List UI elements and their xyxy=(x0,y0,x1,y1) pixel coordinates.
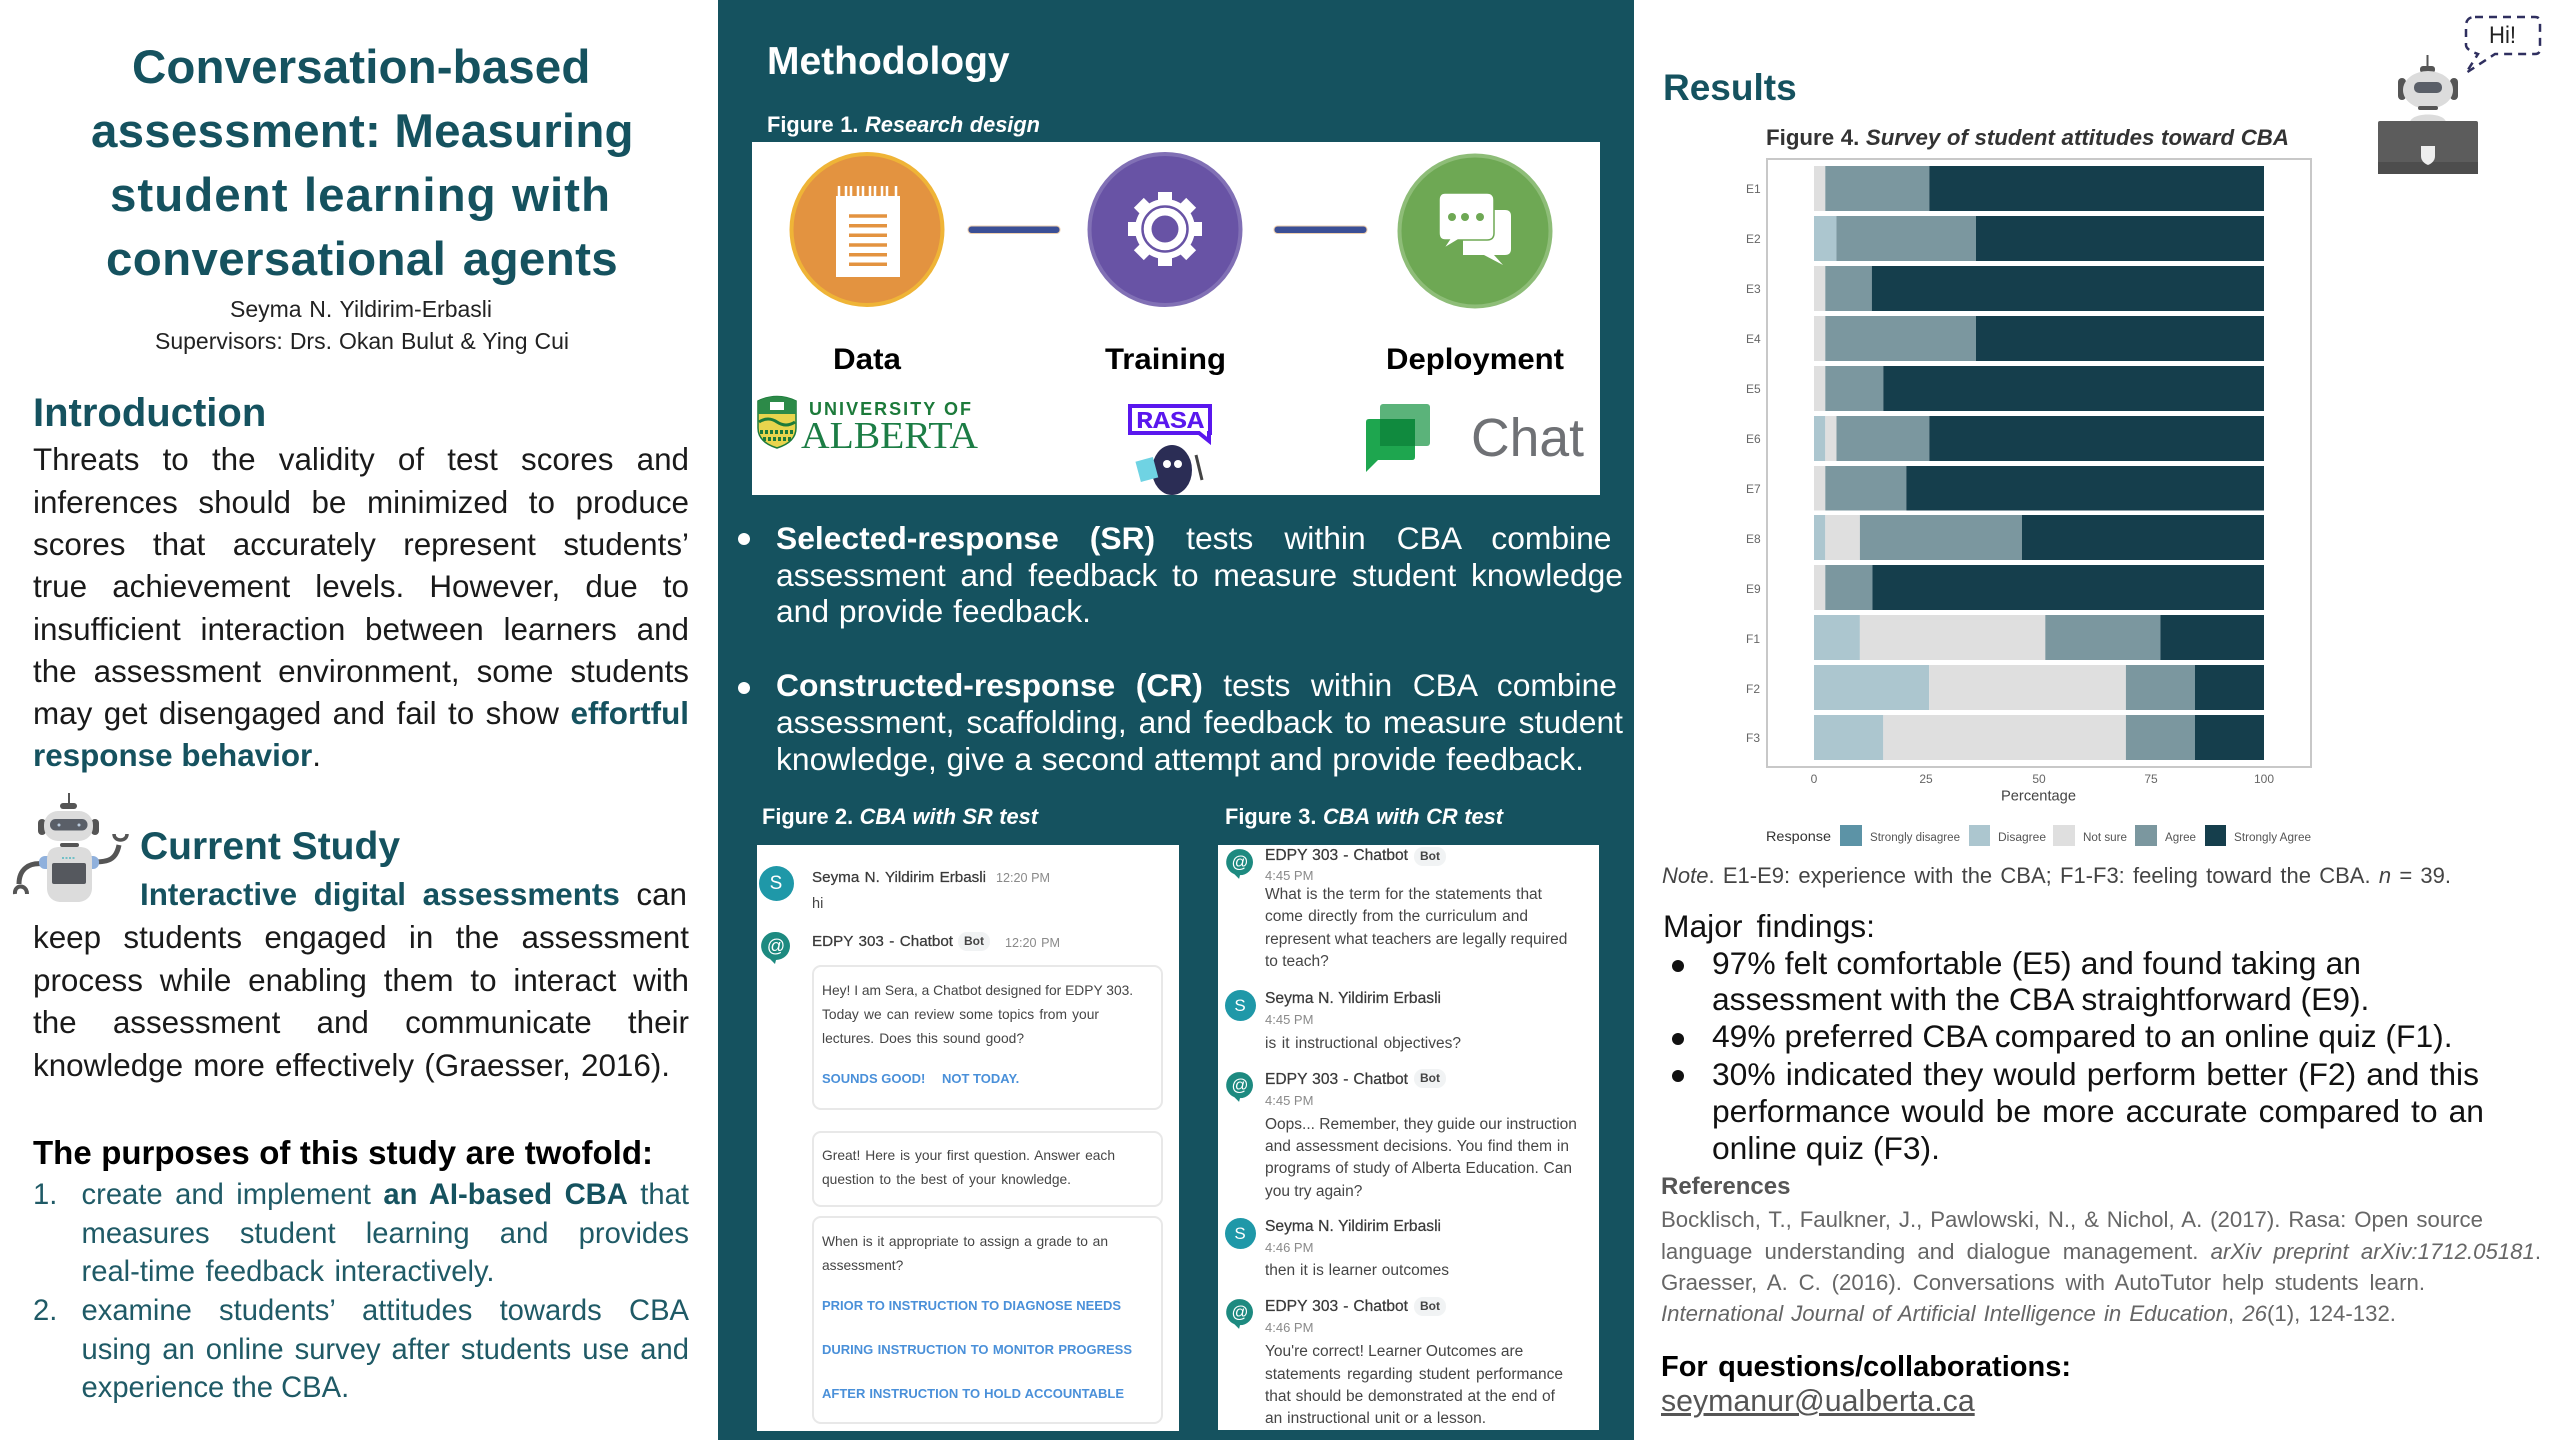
text block: major findings: online quiz (F3). xyxy=(1712,1130,1940,1166)
chatbot question: come directly from the curriculum and xyxy=(1265,908,1528,925)
card: multiple choice question: When is it appropriate to assign a grade to an xyxy=(822,1234,1108,1249)
timestamp: 12:20 PM xyxy=(996,871,1050,885)
student answer xyxy=(1225,990,1461,1052)
text block: current study xyxy=(33,877,689,1083)
bullet: selected-response tests: assessment and feedback to measure student knowledge xyxy=(776,557,1623,593)
legend xyxy=(1766,825,2311,846)
bars: E9 xyxy=(1814,565,2264,610)
icon: training gear xyxy=(1090,154,1240,305)
contact block: seymanur@ualberta.ca xyxy=(1661,1385,1975,1418)
logo: RASA xyxy=(1130,406,1210,441)
y axis labels: E3 xyxy=(1746,282,1761,296)
numbered list: purposes: create and implement an AI-based CBA that xyxy=(82,1179,689,1211)
authors and supervisors: Seyma N. Yildirim-Erbasli xyxy=(230,296,492,322)
heading: purposes of the study: The purposes of this study are twofold: xyxy=(33,1134,653,1171)
title: conversational agents xyxy=(106,233,618,286)
figure 1: research design xyxy=(752,142,1600,495)
title: student learning with xyxy=(110,169,611,222)
student second attempt: then it is learner outcomes xyxy=(1265,1262,1449,1279)
title: Conversation-based xyxy=(132,41,590,94)
legend: Strongly Agree xyxy=(2234,832,2311,844)
arrow: connector data to training xyxy=(968,226,1060,234)
bullet: selected-response tests: Selected-response (SR) tests within CBA combine xyxy=(776,520,1612,556)
bullet: constructed-response tests: knowledge, give a second attempt and provide feedback. xyxy=(776,741,1584,777)
note under figure 4: Note. E1-E9: experience with the CBA; F1-F3: feeling toward the CBA. n = 39. xyxy=(1662,863,2451,888)
card: first question intro: Great! Here is your first question. Answer each xyxy=(822,1148,1115,1163)
text block: current study: Interactive digital assessments can xyxy=(140,877,687,912)
chatbot question: 4:45 PM xyxy=(1265,868,1313,883)
chatbot scaffolding feedback: programs of study of Alberta Education. Can xyxy=(1265,1160,1572,1177)
chatbot scaffolding feedback: and assessment decisions. You find them in xyxy=(1265,1138,1569,1155)
arrow: connector training to deployment xyxy=(1274,226,1367,234)
icon: waving robot xyxy=(12,793,129,902)
bars: E3 xyxy=(1814,266,2264,311)
logo: University of Alberta: ALBERTA xyxy=(801,415,979,457)
card: greeting: NOT TODAY. xyxy=(942,1071,1019,1086)
bullet: constructed-response tests: Constructed-response (CR) tests within CBA combine xyxy=(776,667,1617,703)
text block: references: Graesser, A. C. (2016). Conversations with AutoTutor help students learn. xyxy=(1661,1270,2425,1295)
chatbot scaffolding feedback: EDPY 303 - Chatbot xyxy=(1265,1071,1408,1088)
logo: Google Chat xyxy=(1366,404,1584,472)
chatbot final feedback: Bot xyxy=(1420,1299,1440,1313)
numbered list: purposes: 1. xyxy=(33,1179,57,1211)
text block: references: language understanding and dialogue management. arXiv preprint arXiv:1712.05181. xyxy=(1661,1239,2541,1264)
bullet: selected-response tests: and provide feedback. xyxy=(776,593,1091,629)
chatbot final feedback: 4:46 PM xyxy=(1265,1320,1313,1335)
logo: RASA: RASA xyxy=(1136,409,1205,436)
card: greeting: Today we can review some topics from your xyxy=(822,1007,1099,1022)
chatbot scaffolding feedback: 4:45 PM xyxy=(1265,1093,1313,1108)
chatbot question: EDPY 303 - Chatbot xyxy=(1265,847,1408,864)
heading: Current Study: Current Study xyxy=(140,825,400,868)
bars: E4 xyxy=(1814,316,2264,361)
chatbot scaffolding feedback: Bot xyxy=(1420,1071,1440,1085)
x axis labels: 100 xyxy=(2254,772,2274,786)
numbered list: purposes: real-time feedback interactively. xyxy=(82,1256,494,1288)
numbered list: purposes: measures student learning and provides xyxy=(82,1218,689,1250)
title xyxy=(91,41,634,286)
title: assessment: Measuring xyxy=(91,105,634,158)
student second attempt: S xyxy=(1234,1224,1246,1242)
text block: major findings: 49% preferred CBA compared to an online quiz (F1). xyxy=(1712,1018,2453,1054)
logo: Google Chat: Chat xyxy=(1471,408,1584,468)
student answer: is it instructional objectives? xyxy=(1265,1035,1461,1052)
y axis labels: E6 xyxy=(1746,432,1761,446)
card: multiple choice question: DURING INSTRUCTION TO MONITOR PROGRESS xyxy=(822,1342,1132,1357)
student second attempt: 4:46 PM xyxy=(1265,1240,1313,1255)
y axis labels: F2 xyxy=(1746,682,1760,696)
bullet: constructed-response tests xyxy=(738,667,1623,777)
avatar: student: S xyxy=(770,872,782,894)
avatar: student xyxy=(758,866,794,900)
card: first question intro xyxy=(812,1131,1163,1207)
text block: current study: knowledge more effectively (Graesser, 2016). xyxy=(33,1048,670,1083)
text block: introduction: the assessment environment, some students xyxy=(33,654,689,689)
card: multiple choice question: PRIOR TO INSTRUCTION TO DIAGNOSE NEEDS xyxy=(822,1298,1121,1313)
text block: major findings: 97% felt comfortable (E5) and found taking an xyxy=(1712,944,2361,980)
student second attempt: Seyma N. Yildirim Erbasli xyxy=(1265,1218,1441,1235)
bars: F2 xyxy=(1814,665,2264,710)
chatbot message header: EDPY 303 - Chatbot xyxy=(812,933,953,950)
legend: Strongly disagree xyxy=(1870,832,1960,844)
chatbot final feedback: an instructional unit or a lesson. xyxy=(1265,1410,1486,1427)
card: greeting: Hey! I am Sera, a Chatbot designed for EDPY 303. xyxy=(822,983,1133,998)
chatbot final feedback: You're correct! Learner Outcomes are xyxy=(1265,1343,1523,1360)
chatbot final feedback: EDPY 303 - Chatbot xyxy=(1265,1298,1408,1315)
numbered list: purposes: 2. xyxy=(33,1295,57,1327)
chart: survey of student attitudes, stacked bars xyxy=(1746,158,2312,846)
chatbot final feedback: @ xyxy=(1232,1302,1248,1321)
y axis labels: E7 xyxy=(1746,482,1761,496)
chatbot final feedback: statements regarding student performance xyxy=(1265,1366,1563,1383)
text block: references xyxy=(1661,1173,2541,1326)
icon: data notepad xyxy=(792,154,942,305)
label: Data: Data xyxy=(833,343,901,376)
icon: robot with laptop saying Hi: Hi! xyxy=(2489,22,2516,49)
y axis labels: F1 xyxy=(1746,632,1760,646)
chatbot question: to teach? xyxy=(1265,953,1329,970)
text block: major findings xyxy=(1663,908,2484,1166)
authors and supervisors xyxy=(155,296,569,354)
bullet: constructed-response tests: assessment, scaffolding, and feedback to measure student xyxy=(776,704,1623,740)
numbered list: purposes: examine students’ attitudes towards CBA xyxy=(82,1295,689,1327)
legend: Agree xyxy=(2165,832,2196,844)
card: greeting: lectures. Does this sound good? xyxy=(822,1031,1024,1046)
y axis labels: E5 xyxy=(1746,382,1761,396)
text block: introduction: inferences should be minimized to produce xyxy=(33,485,689,520)
student message: hi xyxy=(812,896,823,912)
bullet: selected-response tests xyxy=(738,520,1623,629)
icon: RASA mascot xyxy=(1135,445,1202,495)
text block: references: References xyxy=(1661,1173,1790,1200)
bars: E5 xyxy=(1814,366,2264,411)
text block: introduction: may get disengaged and fail to show effortful xyxy=(33,696,689,731)
student answer: 4:45 PM xyxy=(1265,1012,1313,1027)
text block: current study: the assessment and communicate their xyxy=(33,1005,689,1040)
panel: methodology xyxy=(718,0,1634,1440)
heading: Methodology: Methodology xyxy=(767,40,1010,83)
bars: E2 xyxy=(1814,216,2264,261)
caption: figure 3: Figure 3. CBA with CR test xyxy=(1225,804,1503,829)
student answer: S xyxy=(1234,996,1246,1015)
bars: E1 xyxy=(1814,166,2264,211)
chatbot question: @ xyxy=(1232,853,1248,872)
caption: figure 2: Figure 2. CBA with SR test xyxy=(762,804,1038,829)
legend: Disagree xyxy=(1998,832,2046,844)
bars: E6 xyxy=(1814,416,2264,461)
chatbot scaffolding feedback xyxy=(1226,1069,1577,1200)
icon: robot with laptop saying Hi xyxy=(2378,16,2542,174)
caption: figure 1: Figure 1. Research design xyxy=(767,112,1040,137)
x axis labels: 75 xyxy=(2144,772,2158,786)
text block: references: Bocklisch, T., Faulkner, J., Pawlowski, N., & Nichol, A. (2017). Rasa: Open source xyxy=(1661,1207,2483,1232)
bars: F3 xyxy=(1814,715,2264,760)
bars: E7 xyxy=(1814,466,2264,510)
chatbot question: Bot xyxy=(1420,849,1440,863)
x axis labels xyxy=(1811,772,2274,786)
text block: introduction: Threats to the validity of test scores and xyxy=(33,442,689,477)
student second attempt xyxy=(1225,1218,1449,1279)
text block: current study: process while enabling them to interact with xyxy=(33,963,689,998)
card: multiple choice question: assessment? xyxy=(822,1258,903,1273)
chatbot scaffolding feedback: Oops... Remember, they guide our instruction xyxy=(1265,1116,1577,1133)
contact block xyxy=(1661,1351,2071,1418)
legend: Not sure xyxy=(2083,832,2127,844)
text block: current study: keep students engaged in the assessment xyxy=(33,920,689,955)
text block: introduction: insufficient interaction between learners and xyxy=(33,612,689,647)
y axis labels: E1 xyxy=(1746,182,1761,196)
numbered list: purposes xyxy=(33,1179,689,1404)
x axis labels: 50 xyxy=(2032,772,2046,786)
figure 2: chat with selected-response test xyxy=(757,845,1179,1431)
figure 3: chat with constructed-response test xyxy=(1218,845,1599,1430)
student message header: Seyma N. Yildirim Erbasli xyxy=(812,869,986,886)
logo: University of Alberta: UNIVERSITY OF xyxy=(809,399,971,419)
card: multiple choice question xyxy=(812,1216,1163,1424)
timestamp: 12:20 PM xyxy=(1005,936,1060,950)
text block: major findings: Major findings: xyxy=(1663,908,1875,944)
text block: major findings: performance would be more accurate compared to an xyxy=(1712,1093,2484,1129)
chatbot question xyxy=(1226,847,1567,970)
text block: introduction: scores that accurately represent students’ xyxy=(33,527,689,562)
y axis labels xyxy=(1746,182,1761,745)
heading: Results: Results xyxy=(1663,67,1797,108)
numbered list: purposes: experience the CBA. xyxy=(82,1372,349,1404)
y axis labels: E9 xyxy=(1746,582,1761,596)
avatar: chatbot: @ xyxy=(767,936,785,956)
text block: major findings: 30% indicated they would perform better (F2) and this xyxy=(1712,1056,2479,1092)
x axis labels: 25 xyxy=(1919,772,1933,786)
x axis labels: 0 xyxy=(1811,772,1818,786)
heading: Introduction: Introduction xyxy=(33,391,266,435)
contact block: For questions/collaborations: xyxy=(1661,1351,2071,1383)
chatbot question: What is the term for the statements that xyxy=(1265,886,1542,903)
logo: University of Alberta xyxy=(758,396,979,457)
icon: deployment chat bubbles xyxy=(1400,156,1550,306)
caption: figure 4: Figure 4. Survey of student attitudes toward CBA xyxy=(1766,125,2289,150)
y axis labels: E8 xyxy=(1746,532,1761,546)
text block: introduction: true achievement levels. However, due to xyxy=(33,569,689,604)
card: multiple choice question: AFTER INSTRUCTION TO HOLD ACCOUNTABLE xyxy=(822,1386,1124,1401)
y axis labels: E4 xyxy=(1746,332,1761,346)
card: first question intro: question to the best of your knowledge. xyxy=(822,1172,1071,1187)
bars: E8 xyxy=(1814,515,2264,560)
label: Training: Training xyxy=(1105,343,1226,376)
y axis labels: E2 xyxy=(1746,232,1761,246)
avatar: chatbot xyxy=(761,932,790,964)
chatbot scaffolding feedback: you try again? xyxy=(1265,1183,1362,1200)
bars: F1 xyxy=(1814,615,2264,660)
x axis title: Percentage xyxy=(2001,788,2076,804)
numbered list: purposes: using an online survey after students use and xyxy=(82,1334,689,1366)
chatbot scaffolding feedback: @ xyxy=(1232,1075,1248,1094)
chatbot question: represent what teachers are legally required xyxy=(1265,931,1567,948)
label: Deployment: Deployment xyxy=(1386,343,1564,376)
chatbot final feedback xyxy=(1226,1297,1563,1427)
card: greeting xyxy=(812,965,1163,1110)
bot badge: Bot xyxy=(964,934,984,948)
text block: introduction xyxy=(33,442,689,773)
text block: introduction: response behavior. xyxy=(33,738,321,773)
text block: major findings: assessment with the CBA straightforward (E9). xyxy=(1712,981,2369,1017)
student answer: Seyma N. Yildirim Erbasli xyxy=(1265,990,1441,1007)
y axis labels: F3 xyxy=(1746,731,1760,745)
chatbot final feedback: that should be demonstrated at the end of xyxy=(1265,1388,1555,1405)
text block: references: International Journal of Artificial Intelligence in Education, 26(1), 124-132. xyxy=(1661,1301,2396,1326)
card: greeting: SOUNDS GOOD! xyxy=(822,1071,925,1086)
legend: Response xyxy=(1766,828,1831,844)
bot badge xyxy=(958,932,990,951)
authors and supervisors: Supervisors: Drs. Okan Bulut & Ying Cui xyxy=(155,328,569,354)
